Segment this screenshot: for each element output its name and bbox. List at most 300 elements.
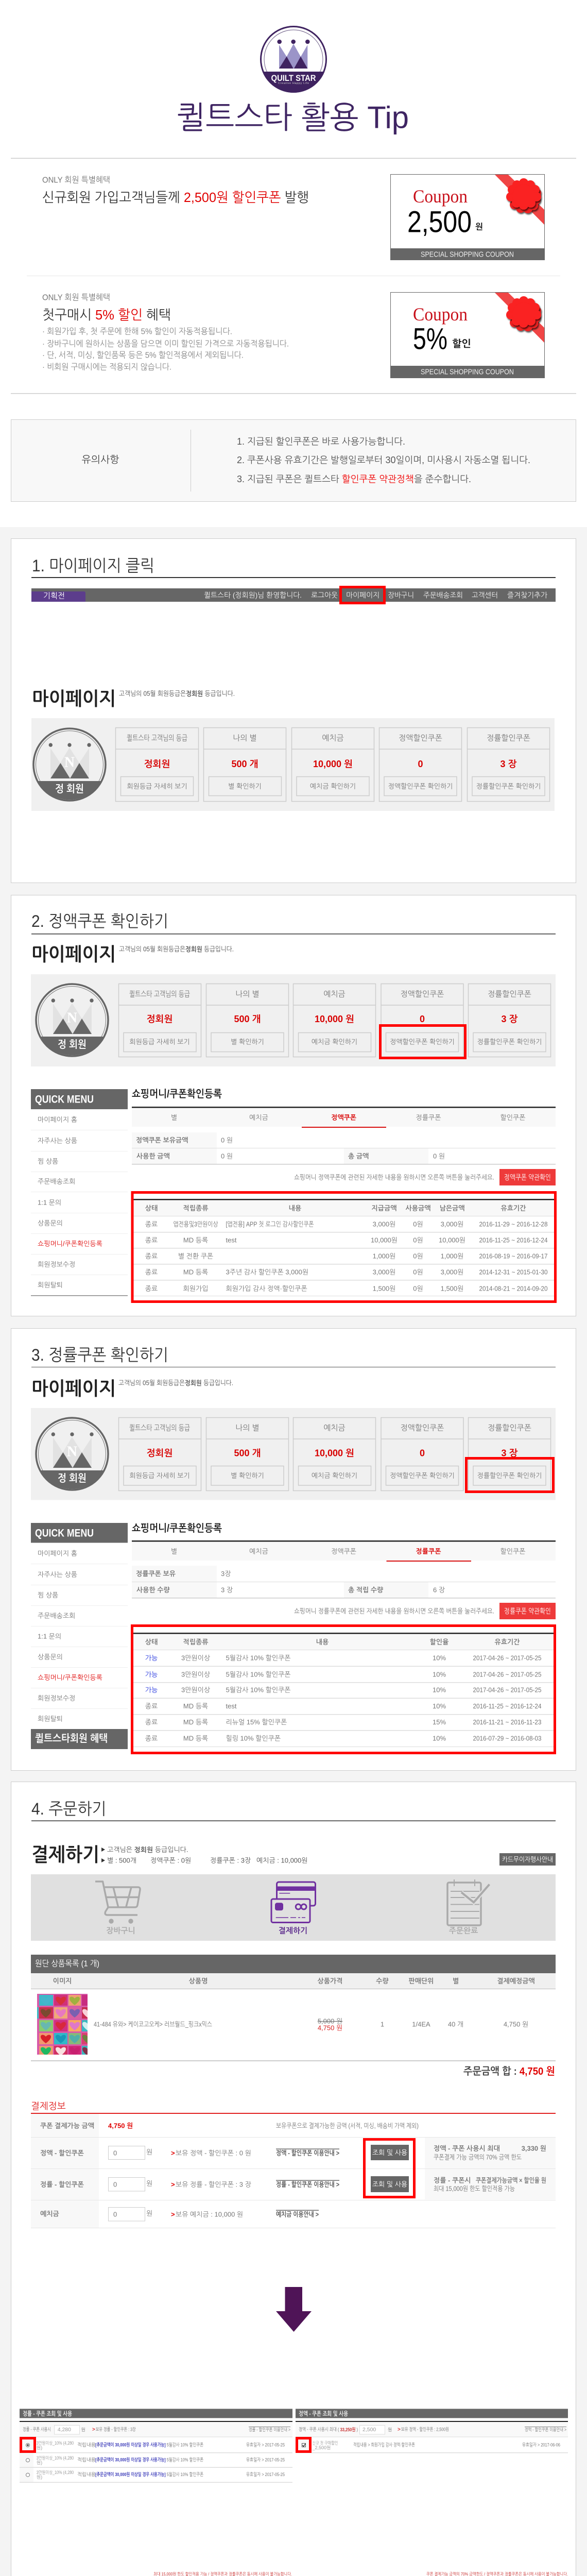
product table: 40 개	[448, 2021, 463, 2028]
my page heading: 마이페이지	[32, 688, 116, 709]
balance table: 0 원	[221, 1152, 233, 1160]
coupon list table: 10%	[433, 1670, 446, 1679]
badge	[36, 984, 108, 1056]
balance table: 3 장	[221, 1586, 233, 1594]
quick menu: 상품문의	[38, 1219, 63, 1227]
title: 퀼트스타 활용 Tip	[177, 100, 409, 135]
coupon list table: 0원	[413, 1268, 423, 1276]
product table: 결제예정금액	[497, 1977, 535, 1985]
top navigation bar: 주문배송조회	[423, 591, 463, 599]
coupon list table: 회원가입 감사 정액·할인쿠폰	[226, 1285, 307, 1292]
coupon list table: 0원	[413, 1220, 423, 1228]
popup: rate coupon: [주문금액이 30,000원 이상일 경우 사용가능]	[95, 2471, 166, 2478]
my page heading	[32, 688, 235, 709]
payment info: 예치금	[40, 2210, 59, 2217]
step 4 heading: 4. 주문하기	[31, 1800, 106, 1818]
coupon list table: 내용	[289, 1205, 301, 1212]
quick menu: QUICK MENU	[35, 1093, 94, 1106]
cards: 0	[420, 1014, 425, 1024]
coupon list table: 1,500원	[441, 1285, 463, 1292]
my page heading: 고객님의 05월 회원등급은정회원 등급입니다.	[119, 689, 235, 698]
tabs: 예치금	[249, 1114, 268, 1121]
coupon list table: 적립종류	[183, 1638, 208, 1646]
callout: lookup buttons	[365, 2139, 414, 2197]
coupon list table: 3,000원	[373, 1268, 395, 1276]
coupon list table: [앱전용] APP 첫 로그인 감사할인쿠폰	[226, 1220, 314, 1228]
payment info: 원	[146, 2148, 152, 2156]
coupon section	[132, 1089, 556, 1301]
terms button: 정액쿠폰 약관확인	[504, 1173, 551, 1181]
popup: rate coupon: 정률 - 쿠폰 조회 및 사용	[23, 2410, 73, 2417]
quick menu: 찜 상품	[38, 1157, 58, 1165]
notice list: 2. 쿠폰사용 유효기간은 발행일로부터 30일이며, 미사용시 자동소멸 됩니다.	[237, 455, 530, 465]
coupon section	[132, 1523, 556, 1753]
payment info: >	[171, 2149, 175, 2157]
step 2 heading: 2. 정액쿠폰 확인하기	[31, 912, 168, 930]
payment info: 보유 정액 - 할인쿠폰 : 0 원	[176, 2149, 251, 2157]
quick menu: 쇼핑머니/쿠폰확인등록	[38, 1240, 102, 1248]
payment info: 정액 - 할인쿠폰 이용안내 >	[276, 2149, 339, 2157]
cards: 회원등급 자세히 보기	[129, 1038, 190, 1046]
coupon list table: 앱전용및3만원이상	[173, 1220, 218, 1228]
popup: fixed coupon: _2,500원	[312, 2445, 331, 2450]
terms button: 쇼핑머니 정액쿠폰에 관련된 자세한 내용을 원하시면 오른쪽 버튼을 눌러주세요.	[294, 1174, 494, 1181]
cards: 정회원	[147, 1448, 172, 1458]
cards: 예치금	[323, 1424, 346, 1432]
top navigation bar: 마이페이지	[346, 591, 379, 599]
coupon list table: 1,000원	[373, 1252, 395, 1260]
cards: 정회원	[144, 759, 170, 769]
cards: 정률할인쿠폰	[488, 1424, 531, 1432]
payment info: 조회 및 사용	[372, 2148, 407, 2157]
coupon list table: 5월감사 10% 할인쿠폰	[226, 1654, 291, 1662]
coupon list table: 종료	[145, 1702, 158, 1710]
popup: rate coupon: 보유 정률 - 할인쿠폰 : 3장	[96, 2427, 136, 2433]
cards: 0	[420, 1448, 425, 1458]
terms button: 쇼핑머니 정률쿠폰에 관련된 자세한 내용을 원하시면 오른쪽 버튼을 눌러주세요.	[294, 1607, 494, 1615]
popup: fixed coupon: 원	[388, 2427, 392, 2432]
checkout heading: 정액쿠폰 : 0원	[150, 1857, 191, 1864]
logo: Quilt Star crown: QUILT STAR	[271, 73, 316, 83]
popup: rate coupon: [주문금액이 30,000원 이상일 경우 사용가능]	[95, 2442, 166, 2448]
benefit: first purchase discount: · 비회원 구매시에는 적용되지 않습니다.	[42, 363, 171, 372]
cards: 정률할인쿠폰	[487, 734, 530, 743]
popup: rate coupon: 유효일자 > 2017-05-25	[246, 2442, 285, 2448]
quick menu: QUICK MENU	[35, 1527, 94, 1539]
member summary	[31, 1408, 556, 1500]
my page heading: 고객님의 05월 회원등급은정회원 등급입니다.	[118, 1379, 233, 1387]
benefit: new member coupon: ONLY 회원 특별혜택	[42, 175, 110, 184]
coupon list table: MD 등록	[183, 1702, 208, 1710]
checkout heading: 별 : 500개	[107, 1857, 136, 1864]
cards: 별 확인하기	[228, 782, 262, 790]
coupon list table: 10%	[433, 1702, 446, 1710]
cards	[118, 984, 551, 1057]
coupon list table: 3,000원	[441, 1268, 463, 1276]
badge: N	[67, 1010, 77, 1026]
cards: 나의 별	[233, 734, 257, 743]
cards: 3 장	[502, 1014, 518, 1024]
badge: N	[64, 754, 75, 771]
cards: 정액할인쿠폰	[399, 734, 442, 743]
member summary	[31, 718, 555, 811]
coupon list table: 상태	[145, 1638, 158, 1646]
popup: rate coupon: 적립내용 >	[77, 2456, 100, 2463]
coupon: 2,500 won	[390, 174, 545, 260]
quick menu: 주문배송조회	[38, 1612, 75, 1620]
payment info: >	[171, 2210, 175, 2218]
balance table: 사용한 금액	[136, 1152, 170, 1160]
tabs: 별	[171, 1548, 177, 1555]
popup: fixed coupon	[296, 2409, 568, 2576]
product table: 4,750 원	[504, 2021, 528, 2028]
my page heading: 마이페이지	[31, 944, 116, 964]
quick menu: 찜 상품	[38, 1591, 58, 1599]
notice heading: 유의사항	[81, 454, 119, 466]
popup: rate coupon: 3만원이상_10% (4,280	[37, 2470, 74, 2475]
cards: 예치금	[322, 734, 344, 743]
quick menu: 쇼핑머니/쿠폰확인등록	[38, 1673, 102, 1682]
payment info: 보유 예치금 : 10,000 원	[176, 2210, 243, 2218]
product table: 1	[381, 2021, 384, 2028]
top navigation bar: 퀼트스타 (정회원)님 환영합니다.	[204, 591, 302, 599]
payment info: 원	[146, 2209, 152, 2217]
quick menu: 자주사는 상품	[38, 1570, 77, 1579]
popup: rate coupon: 5월감사 10% 할인쿠폰	[167, 2472, 203, 2478]
popup: rate coupon: 원)	[37, 2460, 42, 2465]
coupon list table: 리뉴얼 15% 할인쿠폰	[226, 1718, 287, 1726]
coupon list table: 3,000원	[441, 1220, 463, 1228]
badge: 정 회원	[55, 784, 84, 795]
coupon list table: 종료	[145, 1268, 158, 1276]
coupon list table: 2016-11-25 ~ 2016-12-24	[473, 1702, 542, 1710]
coupon list table: 5월감사 10% 할인쿠폰	[226, 1686, 291, 1694]
payment info: 쿠폰결제가능금액 × 할인율 원	[476, 2176, 546, 2184]
balance table: 사용한 수량	[136, 1586, 170, 1594]
tabs: 정액쿠폰	[331, 1114, 356, 1121]
callout: rate coupon button	[467, 1458, 553, 1492]
popup: fixed coupon: 적립내용 > 회원가입 감사 정액·할인쿠폰	[353, 2442, 415, 2448]
payment info: 보유 정률 - 할인쿠폰 : 3 장	[176, 2180, 251, 2189]
popup: rate coupon: 적립내용 >	[77, 2442, 100, 2448]
popup: fixed coupon: 신규 첫 구매할인	[312, 2441, 338, 2446]
cards	[118, 1418, 551, 1491]
badge	[33, 728, 106, 801]
popup: fixed coupon: 정액 - 할인쿠폰 이용안내 >	[525, 2427, 566, 2432]
step 3 heading: 3. 정률쿠폰 확인하기	[31, 1346, 168, 1364]
popup: rate coupon: [주문금액이 30,000원 이상일 경우 사용가능]	[95, 2456, 166, 2463]
quick menu: 1:1 문의	[38, 1632, 61, 1640]
member summary	[31, 974, 556, 1066]
coupon list table: 적립종류	[183, 1205, 208, 1212]
my page heading	[31, 1378, 233, 1399]
coupon list table: 1,000원	[441, 1252, 463, 1260]
cards: 별 확인하기	[231, 1471, 264, 1480]
callout: coupon list	[132, 1626, 555, 1753]
popup: rate coupon: 유효일자 > 2017-05-25	[246, 2472, 285, 2478]
coupon list table: 가능	[145, 1686, 158, 1694]
cards: 회원등급 자세히 보기	[127, 782, 187, 790]
product table: 원단 상품목록 (1 개)	[35, 1959, 99, 1968]
popup: rate coupon: 정률 - 할인쿠폰 이용안내 >	[249, 2427, 290, 2432]
my page heading	[31, 944, 234, 964]
panel: step 3 rate coupon	[11, 1328, 576, 1770]
cards: 정액할인쿠폰	[401, 1424, 444, 1432]
icon: order complete clipboard	[447, 1879, 489, 1935]
product table: 4,750 원	[318, 2024, 342, 2032]
coupon: 2,500 won: 2,500	[407, 205, 472, 239]
coupon list table: 0원	[413, 1236, 423, 1244]
coupon list table: 3주년 감사 할인쿠폰 3,000원	[226, 1268, 308, 1276]
product table: 1/4EA	[412, 2021, 430, 2028]
payment info: 정액 - 할인쿠폰	[40, 2149, 84, 2157]
coupon: 5 percent	[390, 293, 545, 378]
coupon list table: 3,000원	[373, 1220, 395, 1228]
popup: fixed coupon: 보유 정액 - 할인쿠폰 : 2,500원	[401, 2427, 449, 2433]
balance table: 6 장	[433, 1586, 445, 1594]
payment info: 최대 15,000원 한도 할인적용 가능	[434, 2184, 515, 2193]
payment info: 결제정보	[31, 2101, 66, 2111]
top navigation bar	[31, 588, 556, 602]
cards: 퀼트스타 고객님의 등급	[127, 734, 187, 743]
cards: 퀼트스타 고객님의 등급	[129, 990, 190, 998]
cards: 10,000 원	[315, 1448, 354, 1458]
quick menu: 마이페이지 홈	[38, 1116, 77, 1123]
coupon list table: 1,500원	[373, 1285, 395, 1292]
terms button: 정률쿠폰 약관확인	[504, 1607, 551, 1615]
coupon section: 쇼핑머니/쿠폰확인등록	[132, 1523, 222, 1534]
coupon list table: test	[226, 1702, 237, 1710]
coupon list table: MD 등록	[183, 1268, 208, 1276]
popup: rate coupon: 5월감사 10% 할인쿠폰	[167, 2458, 203, 2463]
payment info: 4,750 원	[108, 2122, 133, 2130]
cards: 예치금	[323, 990, 346, 998]
payment info: >	[171, 2180, 175, 2189]
quick menu	[31, 1089, 128, 1296]
popup: rate coupon: 3만원이상_10% (4,280	[37, 2455, 74, 2461]
panel: step 4 order	[11, 1782, 576, 2576]
popup: fixed coupon: 유효일자 > 2017-06-06	[522, 2442, 560, 2448]
terms button	[294, 1169, 556, 1185]
top navigation bar: 로그아웃	[311, 591, 338, 599]
cards: 나의 별	[235, 1424, 260, 1432]
quick menu: 퀼트스타회원 혜택	[35, 1733, 108, 1744]
tabs: 정률쿠폰	[416, 1548, 441, 1555]
popup: rate coupon: 원)	[37, 2475, 42, 2480]
tabs: 할인쿠폰	[500, 1548, 525, 1555]
coupon: 5 percent: SPECIAL SHOPPING COUPON	[421, 368, 514, 376]
cards: 500 개	[232, 759, 258, 769]
coupon list table: 유효기간	[501, 1205, 526, 1212]
balance table	[132, 1566, 556, 1598]
top navigation bar: 장바구니	[388, 591, 414, 599]
coupon list table: MD 등록	[183, 1734, 208, 1742]
panel: notice	[11, 419, 576, 502]
popup: fixed coupon: >	[398, 2427, 401, 2433]
coupon list table: 할인율	[430, 1638, 448, 1646]
coupon list table: 사용금액	[406, 1205, 430, 1212]
popup: rate coupon: 유효일자 > 2017-05-25	[246, 2458, 285, 2463]
balance table: 총 금액	[348, 1152, 369, 1160]
cards: 정회원	[147, 1014, 172, 1024]
cards: 예치금 확인하기	[310, 782, 356, 790]
badge: 정 회원	[58, 1039, 87, 1050]
coupon list table: 유효기간	[495, 1638, 520, 1646]
panel: step 1 my page click	[11, 539, 576, 883]
popup: rate coupon: >	[92, 2427, 95, 2433]
icon: credit cards	[271, 1882, 316, 1935]
tabs: 별	[171, 1114, 177, 1121]
quick menu: 회원탈퇴	[38, 1715, 63, 1723]
benefit: first purchase discount: ONLY 회원 특별혜택	[42, 293, 110, 302]
quick menu: 상품문의	[38, 1653, 63, 1661]
coupon list table: 2014-12-31 ~ 2015-01-30	[479, 1268, 548, 1276]
quick menu: 회원정보수정	[38, 1260, 75, 1268]
coupon list table	[133, 1199, 554, 1296]
tabs	[132, 1542, 556, 1562]
cards: 3 장	[500, 759, 517, 769]
coupon list table: 3만원이상	[181, 1654, 210, 1662]
coupon list table: 종료	[145, 1734, 158, 1742]
payment info: 조회 및 사용	[372, 2180, 407, 2188]
callout: coupon list	[132, 1192, 555, 1301]
quick menu	[31, 1523, 128, 1749]
balance table: 3장	[221, 1570, 231, 1578]
product table: 판매단위	[409, 1977, 434, 1985]
coupon list table: 별 전환 쿠폰	[178, 1252, 213, 1260]
order total: 주문금액 합 : 4,750 원	[463, 2066, 555, 2077]
product image: heart quilt fabric	[37, 1994, 88, 2055]
panel: step 2 fixed coupon	[11, 895, 576, 1316]
coupon list table: 종료	[145, 1285, 158, 1292]
top navigation bar: 기획전	[43, 591, 65, 601]
top navigation bar: 즐겨찾기추가	[507, 591, 548, 599]
tabs	[132, 1108, 556, 1128]
coupon section: 쇼핑머니/쿠폰확인등록	[132, 1089, 222, 1100]
coupon list table: 10,000원	[371, 1236, 398, 1244]
my page heading: 고객님의 05월 회원등급은정회원 등급입니다.	[119, 945, 234, 953]
coupon list table: 2016-07-29 ~ 2016-08-03	[473, 1734, 542, 1742]
coupon list table: 2017-04-26 ~ 2017-05-25	[473, 1670, 542, 1679]
benefit: new member coupon: 신규회원 가입고객님들께 2,500원 할인쿠폰 발행	[42, 190, 309, 205]
quick menu: 자주사는 상품	[38, 1137, 77, 1145]
quick menu: 회원탈퇴	[38, 1281, 63, 1289]
cards: 정률할인쿠폰 확인하기	[476, 782, 541, 790]
balance table: 0 원	[433, 1152, 445, 1160]
product table: 41-484 유와> 케이코고오케> 러브월드_핑크x믹스	[94, 2021, 212, 2028]
popup: rate coupon: 적립내용 >	[77, 2471, 100, 2478]
notice list: 3. 지급된 쿠폰은 퀼트스타 할인쿠폰 약관정책을 준수합니다.	[237, 474, 471, 484]
arrow: down	[276, 2287, 312, 2332]
coupon list table: test	[226, 1236, 237, 1244]
coupon list table: 2016-11-21 ~ 2016-11-23	[473, 1718, 542, 1726]
cards: 10,000 원	[313, 759, 353, 769]
popup: rate coupon: 3만원이상_10% (4,280	[37, 2441, 74, 2446]
coupon list table: 10%	[433, 1654, 446, 1662]
coupon: 2,500 won: SPECIAL SHOPPING COUPON	[421, 250, 514, 259]
popup: fixed coupon: 정액 - 쿠폰 조회 및 사용	[299, 2410, 349, 2417]
callout: my page	[341, 587, 384, 603]
coupon: 5 percent: Coupon	[413, 304, 468, 325]
balance table: 정액쿠폰 보유금액	[136, 1137, 188, 1144]
coupon list table: 종료	[145, 1236, 158, 1244]
coupon list table: 2017-04-26 ~ 2017-05-25	[473, 1654, 542, 1662]
cards	[115, 727, 550, 802]
coupon list table: 10,000원	[439, 1236, 465, 1244]
checkout heading: 결제하기	[31, 1844, 99, 1865]
notice list: 1. 지급된 할인쿠폰은 바로 사용가능합니다.	[237, 436, 405, 447]
payment info: 정률 - 쿠폰시	[434, 2176, 471, 2184]
coupon list table: 상태	[145, 1205, 158, 1212]
coupon list table: 종료	[145, 1252, 158, 1260]
cards: 정액할인쿠폰 확인하기	[390, 1471, 455, 1480]
product table	[31, 1955, 556, 2061]
quick menu: 회원정보수정	[38, 1694, 75, 1702]
coupon list table: 2016-11-29 ~ 2016-12-28	[479, 1220, 548, 1228]
logo: Quilt Star crown	[260, 26, 327, 93]
payment info: 0	[113, 2180, 117, 2189]
tabs: 할인쿠폰	[500, 1114, 525, 1121]
coupon list table: 종료	[145, 1220, 158, 1228]
payment info: 쿠폰 결제가능 금액	[40, 2122, 94, 2130]
badge	[36, 1418, 108, 1490]
quick menu: 마이페이지 홈	[38, 1550, 77, 1557]
cards: 정액할인쿠폰 확인하기	[390, 1038, 455, 1046]
top navigation bar: 고객센터	[472, 591, 498, 599]
coupon list table: 가능	[145, 1670, 158, 1679]
icon: order complete clipboard: 주문완료	[449, 1927, 478, 1935]
benefit: first purchase discount: · 회원가입 후, 첫 주문에 한해 5% 할인이 자동적용됩니다.	[42, 327, 232, 336]
payment info: 쿠폰결제 가능 금액의 70% 금액 한도	[434, 2154, 522, 2161]
cards: 예치금 확인하기	[312, 1038, 357, 1046]
cards: 정률할인쿠폰	[488, 990, 531, 998]
balance table: 정률쿠폰 보유	[136, 1570, 176, 1578]
coupon list table: 남은금액	[440, 1205, 464, 1212]
badge: 정 회원	[58, 1473, 87, 1484]
cards: 500 개	[234, 1014, 261, 1024]
coupon list table: 2016-11-25 ~ 2016-12-24	[479, 1236, 548, 1244]
checkout heading: 고객님은 정회원 등급입니다.	[107, 1845, 188, 1854]
popup: rate coupon: 정률 - 쿠폰 사용시	[23, 2427, 51, 2433]
cards: 퀼트스타 고객님의 등급	[129, 1424, 190, 1432]
payment info	[31, 2101, 556, 2228]
checkout heading: 정률쿠폰 : 3장	[210, 1857, 251, 1864]
coupon: 2,500 won: Coupon	[413, 186, 468, 207]
coupon list table: MD 등록	[183, 1236, 208, 1244]
icon: cart	[95, 1882, 140, 1935]
cards: 10,000 원	[315, 1014, 354, 1024]
benefit: first purchase discount: · 장바구니에 원하시는 상품을 담으면 이미 할인된 가격으로 자동적용됩니다.	[42, 339, 289, 348]
payment info: 원	[146, 2179, 152, 2188]
step 1 heading: 1. 마이페이지 클릭	[32, 556, 154, 575]
product table: 상품가격	[318, 1977, 342, 1985]
checkout heading	[31, 1844, 556, 1866]
popup: rate coupon: 5월감사 10% 할인쿠폰	[167, 2442, 203, 2448]
callout: checkbox select	[297, 2438, 310, 2451]
payment info: 보유쿠폰으로 결제가능한 금액 (서적, 미싱, 배송비 가액 제외)	[276, 2122, 419, 2130]
cards: 정액할인쿠폰 확인하기	[388, 782, 453, 790]
popup: fixed coupon: 2,500	[362, 2427, 376, 2433]
coupon list table: 10%	[433, 1734, 446, 1742]
payment info: 정률 - 할인쿠폰 이용안내 >	[276, 2180, 339, 2189]
benefit: first purchase discount: · 단, 서적, 미싱, 할인품목 등은 5% 할인적용에서 제외됩니다.	[42, 350, 244, 360]
coupon list table: 5월감사 10% 할인쿠폰	[226, 1670, 291, 1679]
cards: 0	[418, 759, 423, 769]
balance table: 0 원	[221, 1137, 233, 1144]
popup: rate coupon: 원	[81, 2427, 85, 2432]
payment info: 예치금 이용안내 >	[276, 2210, 319, 2218]
coupon list table: 가능	[145, 1654, 158, 1662]
